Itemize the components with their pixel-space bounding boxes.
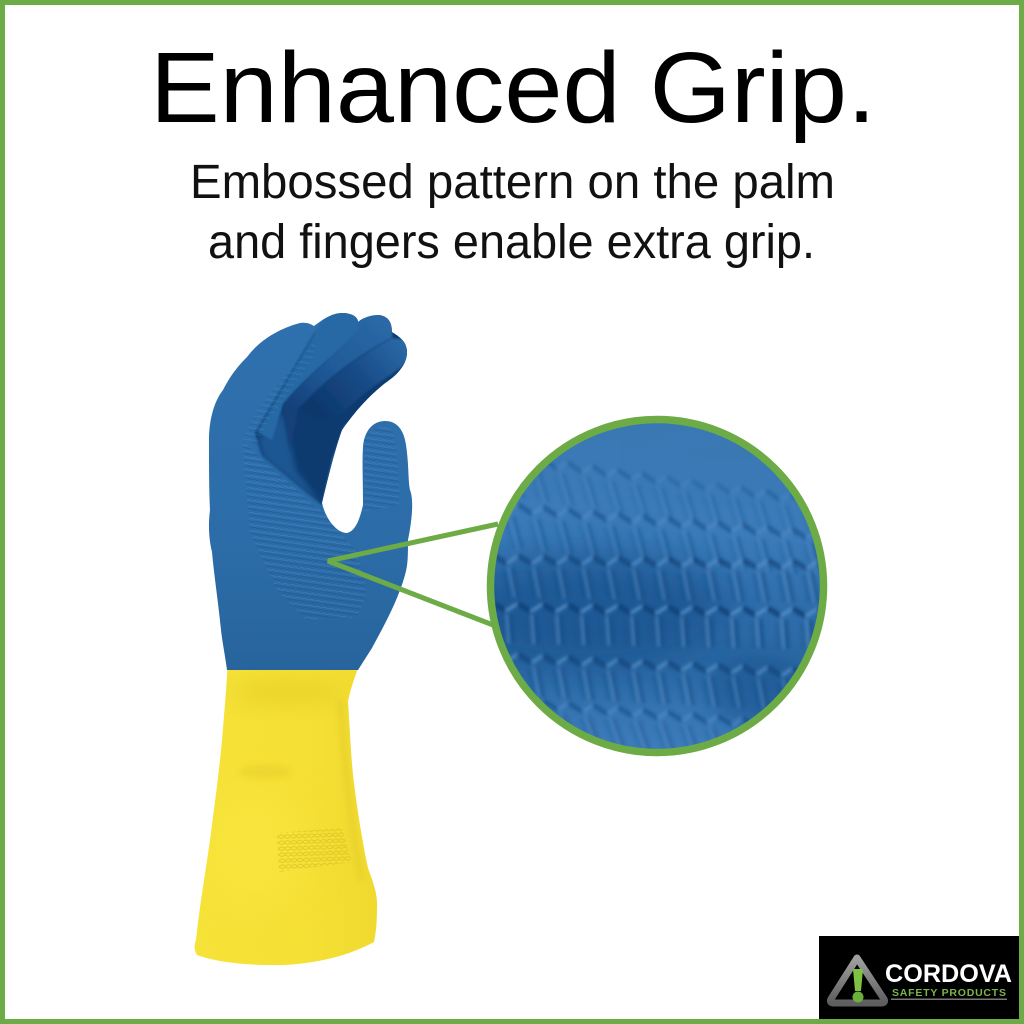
- logo: Cordova Safety Products: [819, 936, 1019, 1019]
- hexagon rows: [495, 461, 820, 748]
- subtitle: Embossed pattern on the palm: [190, 156, 835, 209]
- palm texture: [242, 440, 367, 620]
- magnified grip pattern circle: [486, 416, 828, 756]
- thumb texture: [364, 426, 399, 512]
- logo background: [819, 936, 1019, 1019]
- circle outline: [490, 420, 824, 752]
- glove cuff: yellow: [194, 670, 378, 966]
- logo icon: warning triangle: [830, 958, 885, 1003]
- middle finger: [257, 305, 365, 440]
- shadow between fingers: [255, 330, 420, 505]
- lower finger shadow: [258, 414, 318, 499]
- subtitle: [190, 156, 835, 269]
- callout pointer lines: [328, 524, 498, 625]
- title: Enhanced Grip.: [150, 32, 876, 144]
- glove illustration: [190, 305, 420, 970]
- little finger: [316, 337, 407, 408]
- ring finger: [283, 315, 394, 437]
- macro texture: [494, 423, 820, 749]
- subtitle: and fingers enable extra grip.: [208, 216, 815, 269]
- index finger texture: [243, 340, 317, 445]
- logo tagline: SAFETY PRODUCTS: [892, 987, 1006, 999]
- logo wordmark: CORDOVA: [885, 960, 1012, 988]
- glove hand: blue: [208, 313, 412, 670]
- cuff texture: [277, 828, 352, 872]
